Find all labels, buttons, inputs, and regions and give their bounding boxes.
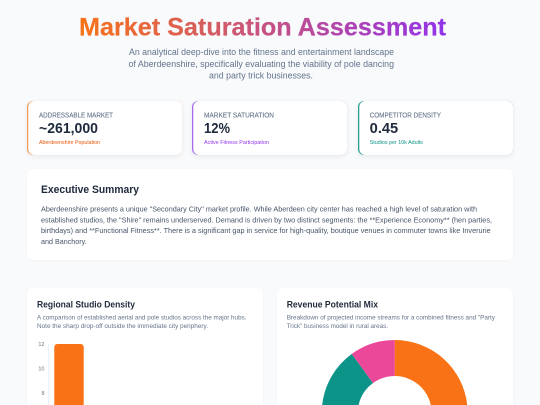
value: density: 0.45 <box>370 121 398 137</box>
value: saturation: 12% <box>204 121 230 137</box>
note: saturation source: Active Fitness Participation <box>204 140 269 146</box>
title: Market Saturation Assessment <box>79 14 447 42</box>
y-axis labels: 10 <box>38 366 44 372</box>
note: density unit: Studios per 10k Adults <box>370 140 423 146</box>
summary text: Aberdeenshire presents a unique "Secondary City" market profile. While Aberdeen city center has reached a high level of saturation with <box>41 204 477 213</box>
summary text <box>41 204 492 246</box>
value: population: ~261,000 <box>39 121 98 137</box>
label: addressable market: ADDRESSABLE MARKET <box>39 111 114 120</box>
summary text: birthdays) and **Functional Fitness**. There is a significant gap in service for high-quality, boutique venues in commuter towns like Inverurie <box>41 226 491 235</box>
segment: teal <box>322 354 373 405</box>
heading: executive summary: Executive Summary <box>41 184 140 196</box>
y-axis labels <box>38 342 44 397</box>
description: revenue potential mix: Trick" business model in rural areas. <box>287 323 388 330</box>
label: market saturation: MARKET SATURATION <box>204 111 274 120</box>
description: regional studio density: Note the sharp drop-off outside the immediate city periphery. <box>37 323 208 330</box>
subtitle: and party trick businesses. <box>209 70 313 80</box>
note: population source: Aberdeenshire Population <box>39 140 100 146</box>
y-axis labels: 8 <box>41 391 44 397</box>
segment: orange <box>395 340 467 405</box>
description: revenue potential mix <box>287 315 496 330</box>
label: competitor density: COMPETITOR DENSITY <box>370 111 441 120</box>
summary text: and Banchory. <box>41 237 87 246</box>
heading: revenue potential mix: Revenue Potential Mix <box>287 300 379 310</box>
bar chart <box>38 342 84 405</box>
description: revenue potential mix: Breakdown of projected income streams for a combined fitness and "Party <box>287 315 496 322</box>
y-axis labels: 12 <box>38 342 44 348</box>
subtitle: of Aberdeenshire, specifically evaluating the viability of pole dancing <box>128 59 394 69</box>
panel: market saturation <box>192 101 347 155</box>
subtitle: An analytical deep-dive into the fitness and entertainment landscape <box>129 47 394 57</box>
description: regional studio density <box>37 315 247 330</box>
donut chart <box>322 340 467 405</box>
panel: competitor density <box>358 101 513 155</box>
panel: revenue potential mix <box>277 288 513 405</box>
bar: first hub <box>54 344 84 405</box>
panel: executive summary <box>27 169 513 260</box>
segment: pink <box>352 340 395 383</box>
heading: regional studio density: Regional Studio Density <box>37 300 136 310</box>
panel: regional studio density <box>27 288 263 405</box>
summary text: established studios, the "Shire" remains underserved. Demand is driven by two distinct segments: the **Experience Economy** (hen parties, <box>41 215 492 224</box>
description: regional studio density: A comparison of established aerial and pole studios across the major hubs. <box>37 315 247 322</box>
panel: addressable market <box>27 101 182 155</box>
subtitle <box>128 47 394 80</box>
